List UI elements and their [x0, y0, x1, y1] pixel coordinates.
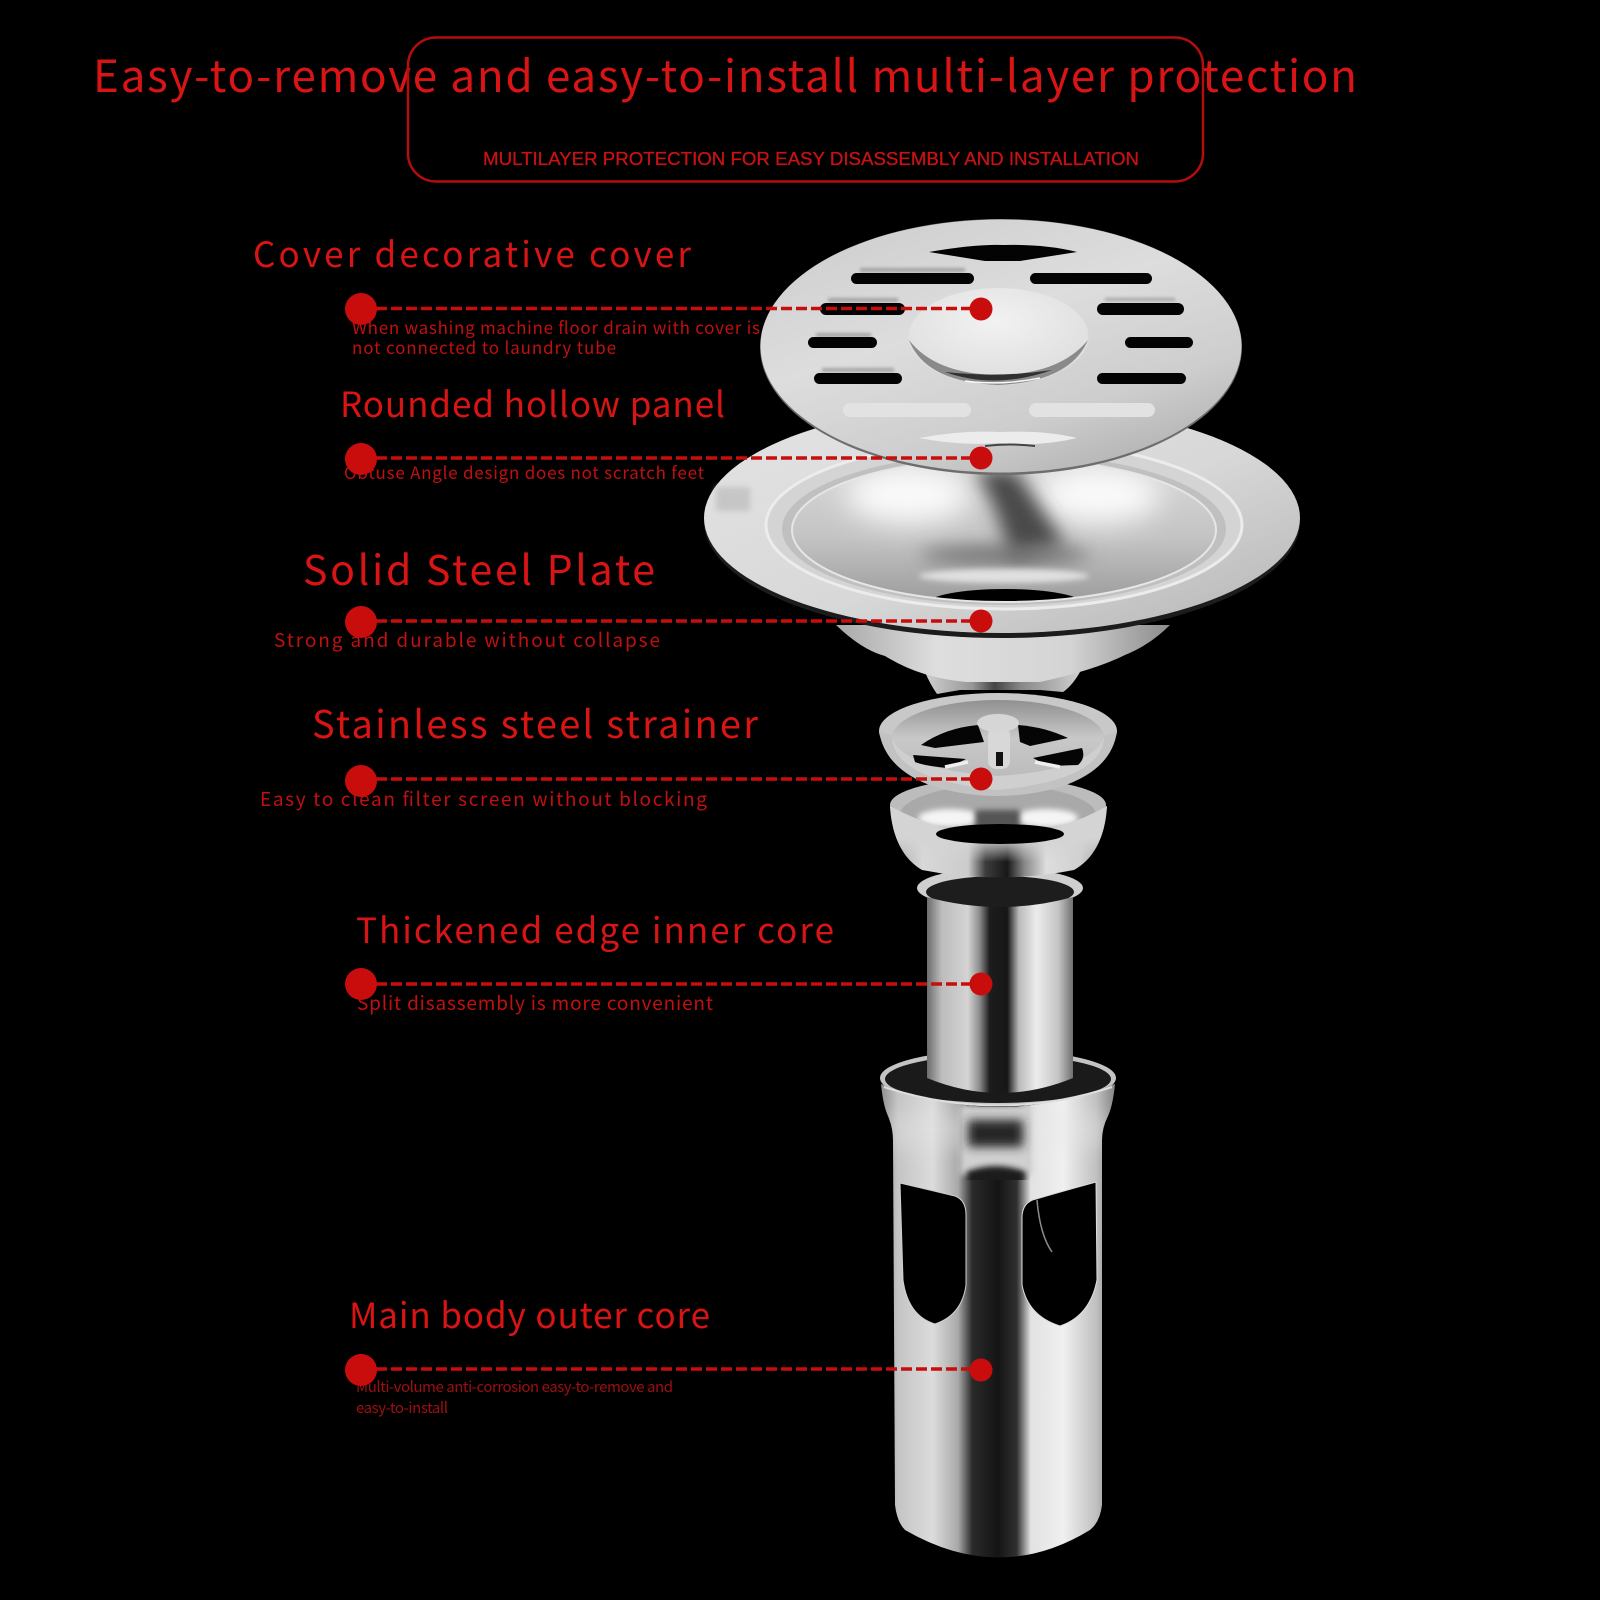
callout line: inner core [345, 968, 992, 1000]
cover lower light slots [843, 403, 1155, 444]
description: outer core [356, 1376, 673, 1418]
callout line: outer core [345, 1354, 992, 1386]
neck [925, 672, 1080, 694]
callout line: panel [345, 443, 992, 475]
strainer holes [913, 725, 1083, 768]
callout line: strainer [345, 765, 992, 797]
flange [704, 406, 1300, 638]
description: cover: When washing machine floor drain with cover is [352, 314, 760, 339]
label: stainless steel strainer: Stainless steel strainer [312, 694, 758, 749]
description: outer core: Multi-volume anti-corrosion easy-to-remove and [356, 1376, 673, 1397]
label: cover decorative cover [253, 227, 760, 359]
strainer knob [988, 727, 1010, 769]
bowl interior [792, 458, 1216, 602]
description: inner core: Split disassembly is more convenient [357, 989, 713, 1016]
label: cover decorative cover: Cover decorative cover [253, 227, 691, 278]
title: Easy-to-remove and easy-to-install multi-layer protection [93, 41, 1357, 105]
product: thickened edge inner core [917, 868, 1083, 1093]
description: strainer: Easy to clean filter screen without blocking [260, 785, 707, 812]
product: second cup [890, 778, 1107, 878]
callout line: cover [345, 293, 992, 325]
product: main body outer core [880, 1050, 1116, 1558]
product: stainless steel strainer [879, 693, 1117, 796]
description: cover [352, 314, 760, 359]
window left [900, 1183, 966, 1324]
description: plate: Strong and durable without collapse [274, 626, 660, 653]
label: solid steel plate: Solid Steel Plate [303, 537, 655, 597]
label: rounded hollow panel [340, 377, 725, 484]
label: solid steel plate [274, 537, 660, 653]
strainer spokes [945, 762, 1060, 767]
cover slot shadows [816, 268, 1175, 372]
label: main body outer core [349, 1288, 710, 1418]
window right [1022, 1182, 1097, 1326]
label: thickened edge inner core [356, 903, 834, 1016]
label: thickened edge inner core: Thickened edge inner core [356, 903, 834, 954]
product: cover decorative cover [760, 219, 1242, 475]
label: rounded hollow panel: Rounded hollow panel [340, 377, 725, 428]
label: main body outer core: Main body outer core [349, 1288, 710, 1339]
description: cover: not connected to laundry tube [352, 334, 616, 359]
product: solid steel plate bowl [704, 403, 1300, 694]
label: stainless steel strainer [260, 694, 758, 812]
description: outer core: easy-to-install [356, 1397, 448, 1418]
description: panel: Obtuse Angle design does not scratch feet [344, 459, 705, 484]
funnel [836, 625, 1170, 682]
subtitle: MULTILAYER PROTECTION FOR EASY DISASSEMBLY AND INSTALLATION [483, 149, 1139, 169]
cover slots [808, 245, 1193, 384]
subtitle box [408, 38, 1203, 182]
cover knob [908, 288, 1088, 385]
callout line: plate [345, 606, 992, 638]
